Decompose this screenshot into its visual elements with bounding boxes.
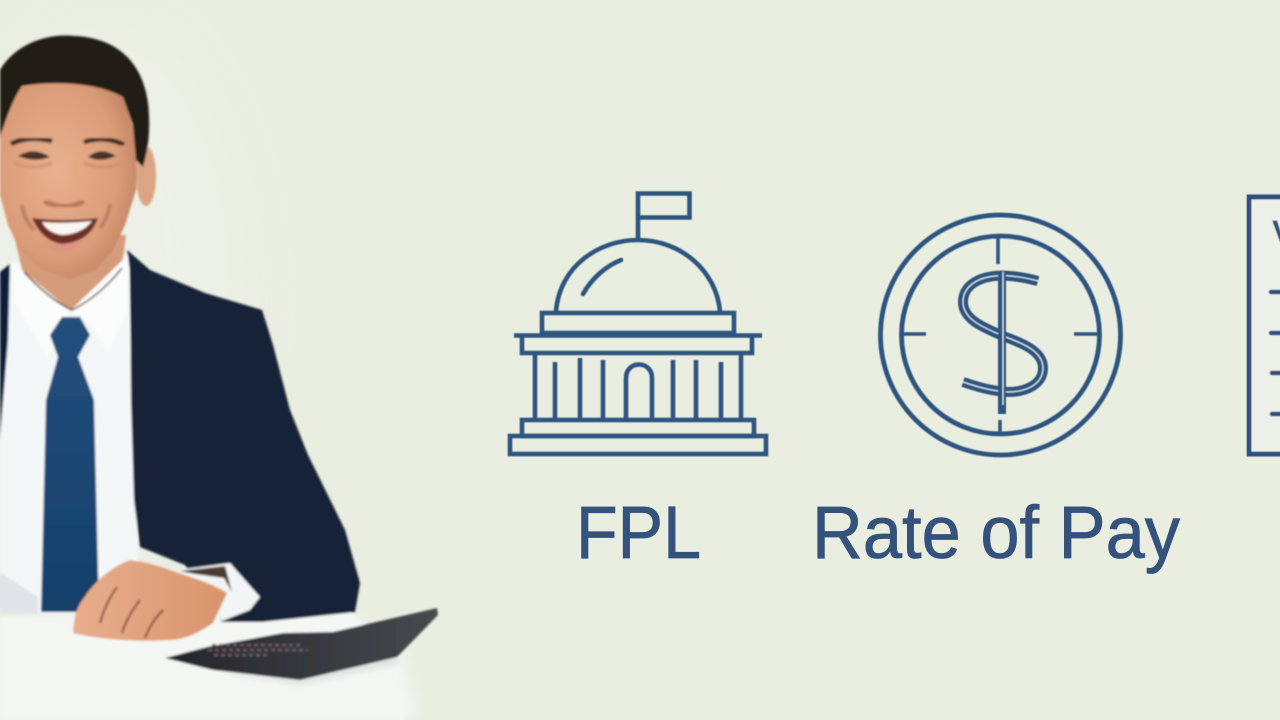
label: Rate of Pay: Rate of Pay [812, 491, 1180, 574]
icon: dollar coin [880, 215, 1120, 455]
label: FPL: FPL [576, 491, 701, 574]
neck line [24, 268, 122, 310]
calculator keys [208, 645, 308, 655]
brows [11, 139, 124, 145]
document frame [1249, 197, 1280, 454]
nose shadow [44, 201, 84, 206]
tick marks [902, 238, 1098, 432]
cornice [514, 333, 762, 338]
dollar sign S [963, 276, 1043, 392]
eye sockets shadow [14, 163, 120, 167]
icon: clipped document [1249, 197, 1280, 454]
jacket right side [127, 250, 360, 622]
lower step [510, 436, 766, 454]
flag [638, 194, 690, 238]
shirt [0, 255, 140, 614]
outer ring [880, 215, 1120, 455]
lower lip [44, 240, 84, 253]
face [0, 80, 137, 279]
jacket left side [0, 264, 10, 440]
shirt cuff [177, 563, 260, 621]
photo: businessman at desk [0, 36, 438, 720]
smile lines [22, 204, 110, 230]
collar [12, 262, 70, 358]
finger lines [100, 587, 163, 638]
desk [0, 612, 418, 720]
dome [556, 240, 720, 311]
upper drum [542, 313, 734, 333]
entablature [522, 336, 752, 353]
calculator [165, 608, 438, 680]
document lines [1271, 292, 1280, 414]
light halo behind the man [0, 30, 240, 570]
watch [180, 566, 232, 592]
tie [41, 317, 99, 612]
desk top [0, 612, 405, 720]
inner ring [902, 236, 1100, 434]
hand [73, 560, 227, 641]
teeth [42, 221, 92, 235]
eyes [18, 151, 116, 160]
shirt shadow [0, 572, 38, 614]
ear [136, 146, 156, 206]
icon: government building [510, 194, 766, 454]
dome highlight [583, 260, 621, 294]
upper step [522, 420, 754, 436]
calculator shadow [215, 655, 400, 685]
hair [0, 36, 149, 167]
columns [535, 355, 741, 418]
dollar sign bar [998, 272, 1006, 414]
door [626, 364, 652, 418]
mouth [32, 218, 98, 244]
neck [14, 235, 126, 312]
